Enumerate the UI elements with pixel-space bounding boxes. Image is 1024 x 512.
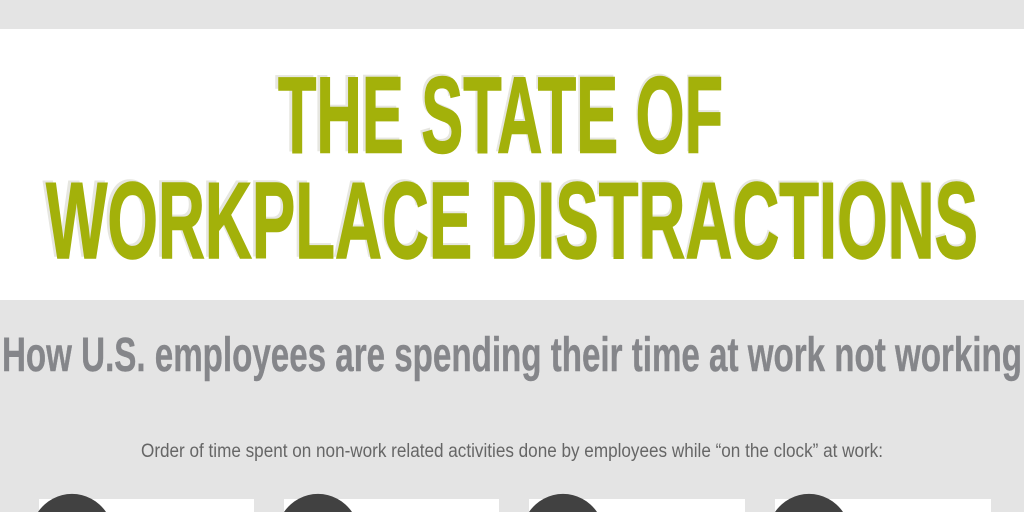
title shadow: THE STATE OF (275, 52, 722, 174)
card 1 (38, 494, 254, 512)
card 3 (529, 494, 745, 512)
card 4 (775, 494, 991, 512)
intro text: Order of time spent on non-work related activities done by employees while “on the clock” at work: (141, 441, 883, 462)
title (46, 54, 978, 282)
card 2 (284, 494, 499, 512)
title shadow (43, 52, 977, 280)
title panel (0, 29, 1024, 300)
